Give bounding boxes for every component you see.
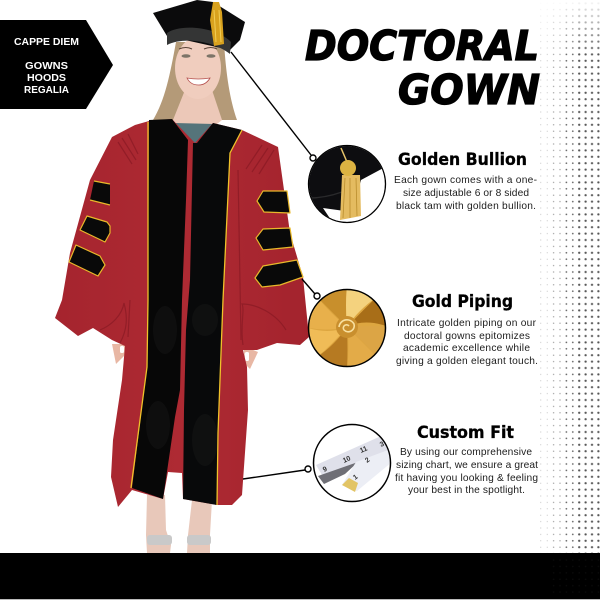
text block: gold piping (396, 292, 538, 367)
left velvet panel (132, 119, 188, 499)
text block: golden bullion (394, 150, 537, 212)
text block: golden bullion: Each gown comes with a one- (394, 175, 537, 186)
text block: gold piping: academic excellence while (403, 343, 530, 354)
bottom black bar (0, 553, 600, 600)
velvet sheen (146, 304, 218, 466)
text block: custom fit: fit having you looking & feeling (395, 473, 538, 484)
connector: hem to custom fit (243, 466, 311, 479)
icon: golden bullion tassel photo (308, 144, 386, 224)
title (305, 22, 540, 114)
icon: gold satin swirl photo (308, 288, 386, 368)
face (175, 37, 221, 99)
legs and sandals (146, 495, 212, 553)
brand badge: GOWNS (25, 61, 68, 72)
halftone dot background (538, 0, 600, 553)
icon: measuring tape photo: 10 (342, 455, 352, 465)
icon: measuring tape photo: 11 (359, 445, 369, 455)
brand badge (0, 20, 113, 109)
icon: measuring tape photo: 3 (379, 441, 385, 449)
text block: golden bullion: black tam with golden bullion. (396, 201, 536, 212)
text block: custom fit: Custom Fit (417, 423, 514, 442)
text block: golden bullion: size adjustable 6 or 8 sided (403, 188, 529, 199)
icon: measuring tape photo: 2 (364, 457, 371, 465)
text block: golden bullion: Golden Bullion (398, 150, 527, 169)
icon: measuring tape photo: 1 (352, 474, 359, 482)
hands (112, 344, 258, 369)
cap (153, 0, 245, 54)
brand badge: CAPPE DIEM (14, 37, 79, 48)
shirt collar (175, 123, 214, 146)
text block: gold piping: doctoral gowns epitomizes (404, 331, 530, 342)
title: DOCTORAL (305, 22, 539, 70)
tassel (210, 2, 224, 46)
brand badge: REGALIA (24, 85, 69, 96)
text block: custom fit: sizing chart, we ensure a great (396, 460, 538, 471)
hair (153, 42, 237, 120)
right velvet panel (183, 123, 242, 505)
title: GOWN (398, 66, 540, 114)
figure: woman wearing doctoral gown (55, 0, 309, 553)
gown body and sleeves (55, 119, 309, 507)
sleeve folds (100, 134, 286, 345)
left sleeve bars (69, 181, 110, 276)
icon: measuring tape photo (312, 423, 392, 503)
right sleeve bars (255, 191, 303, 287)
icon: measuring tape photo: 9 (322, 466, 328, 474)
text block: custom fit: By using our comprehensive (400, 447, 532, 458)
gold piping on panels (131, 122, 148, 488)
text block: gold piping: Gold Piping (412, 292, 513, 311)
connector: sleeve to gold piping (302, 279, 320, 299)
text block: gold piping: Intricate golden piping on our (397, 318, 537, 329)
neck (173, 90, 222, 142)
text block: gold piping: giving a golden elegant touch. (396, 356, 538, 367)
text block: custom fit: your best in the spotlight. (408, 485, 525, 496)
connector: cap to golden bullion (231, 52, 316, 161)
text block: custom fit (395, 423, 538, 496)
brand badge: HOODS (27, 73, 66, 84)
